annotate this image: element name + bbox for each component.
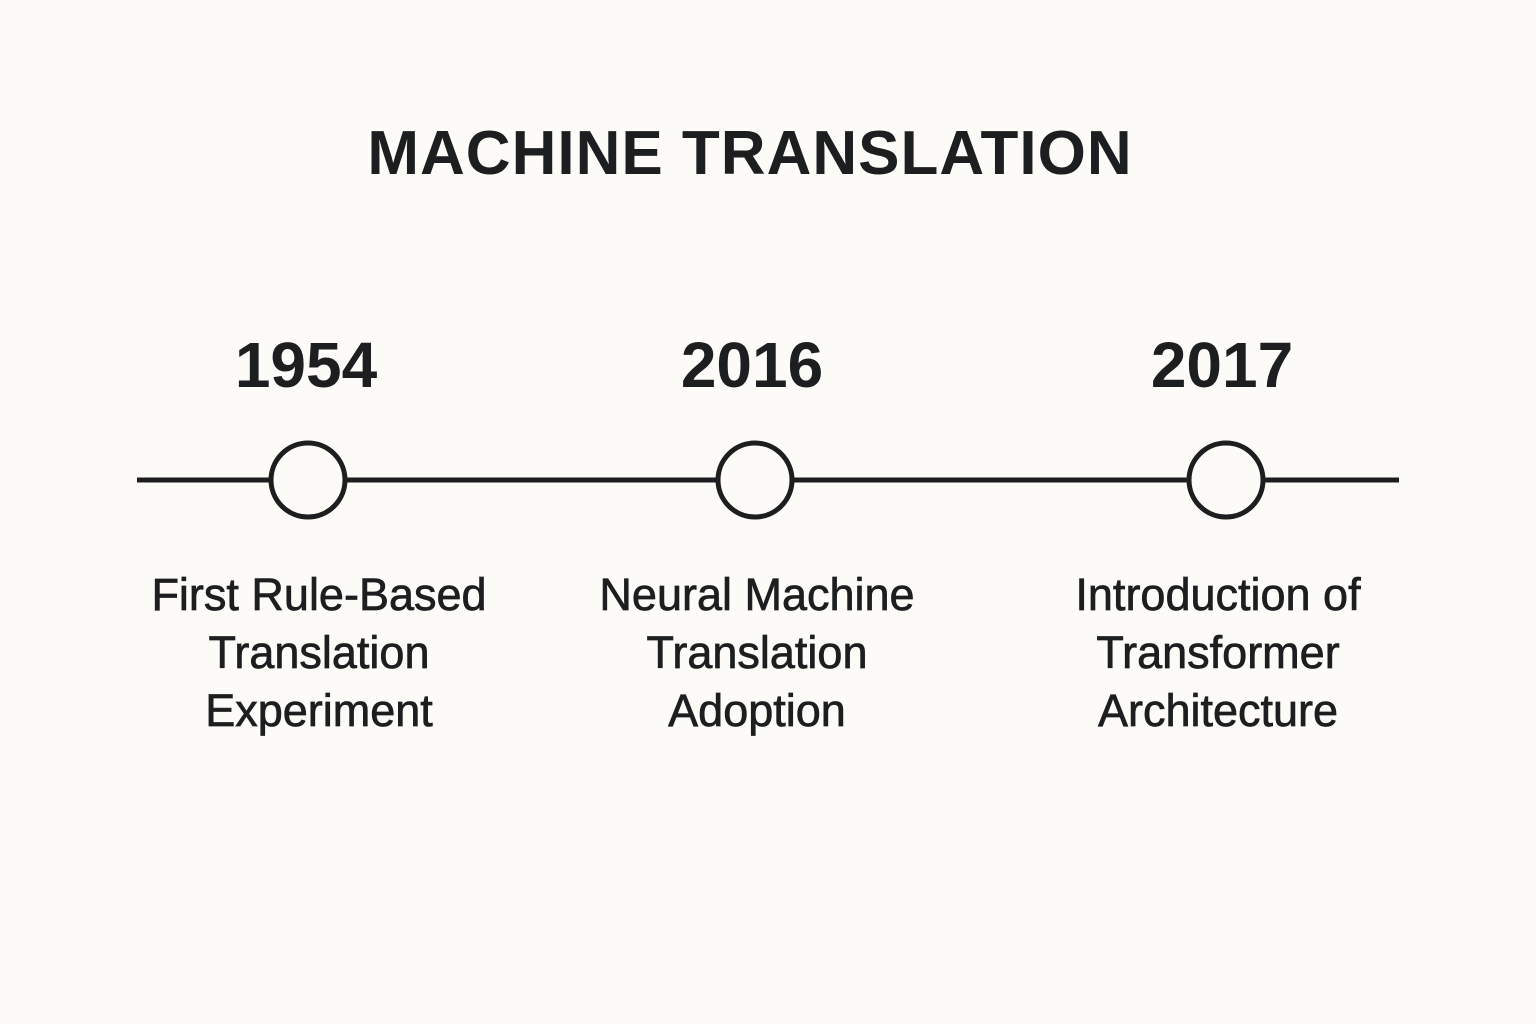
- desc 2016: Translation: [647, 627, 867, 678]
- desc 2016: [599, 569, 915, 736]
- desc 2017: Introduction of: [1075, 569, 1361, 620]
- desc 2017: [1075, 569, 1362, 736]
- node: 2016: [718, 443, 792, 517]
- title: MACHINE TRANSLATION: [367, 119, 1133, 188]
- desc 2016: Adoption: [668, 685, 846, 736]
- year 2016: 2016: [681, 329, 823, 401]
- year 1954: 1954: [235, 329, 377, 401]
- desc 1954: Translation: [209, 627, 429, 678]
- desc 2017: Architecture: [1098, 685, 1338, 736]
- desc 1954: [151, 569, 487, 736]
- node: 2017: [1189, 443, 1263, 517]
- desc 1954: Experiment: [205, 685, 433, 736]
- desc 2017: Transformer: [1096, 627, 1340, 678]
- desc 1954: First Rule-Based: [151, 569, 487, 620]
- year 2017: 2017: [1151, 329, 1293, 401]
- desc 2016: Neural Machine: [599, 569, 915, 620]
- node: 1954: [271, 443, 345, 517]
